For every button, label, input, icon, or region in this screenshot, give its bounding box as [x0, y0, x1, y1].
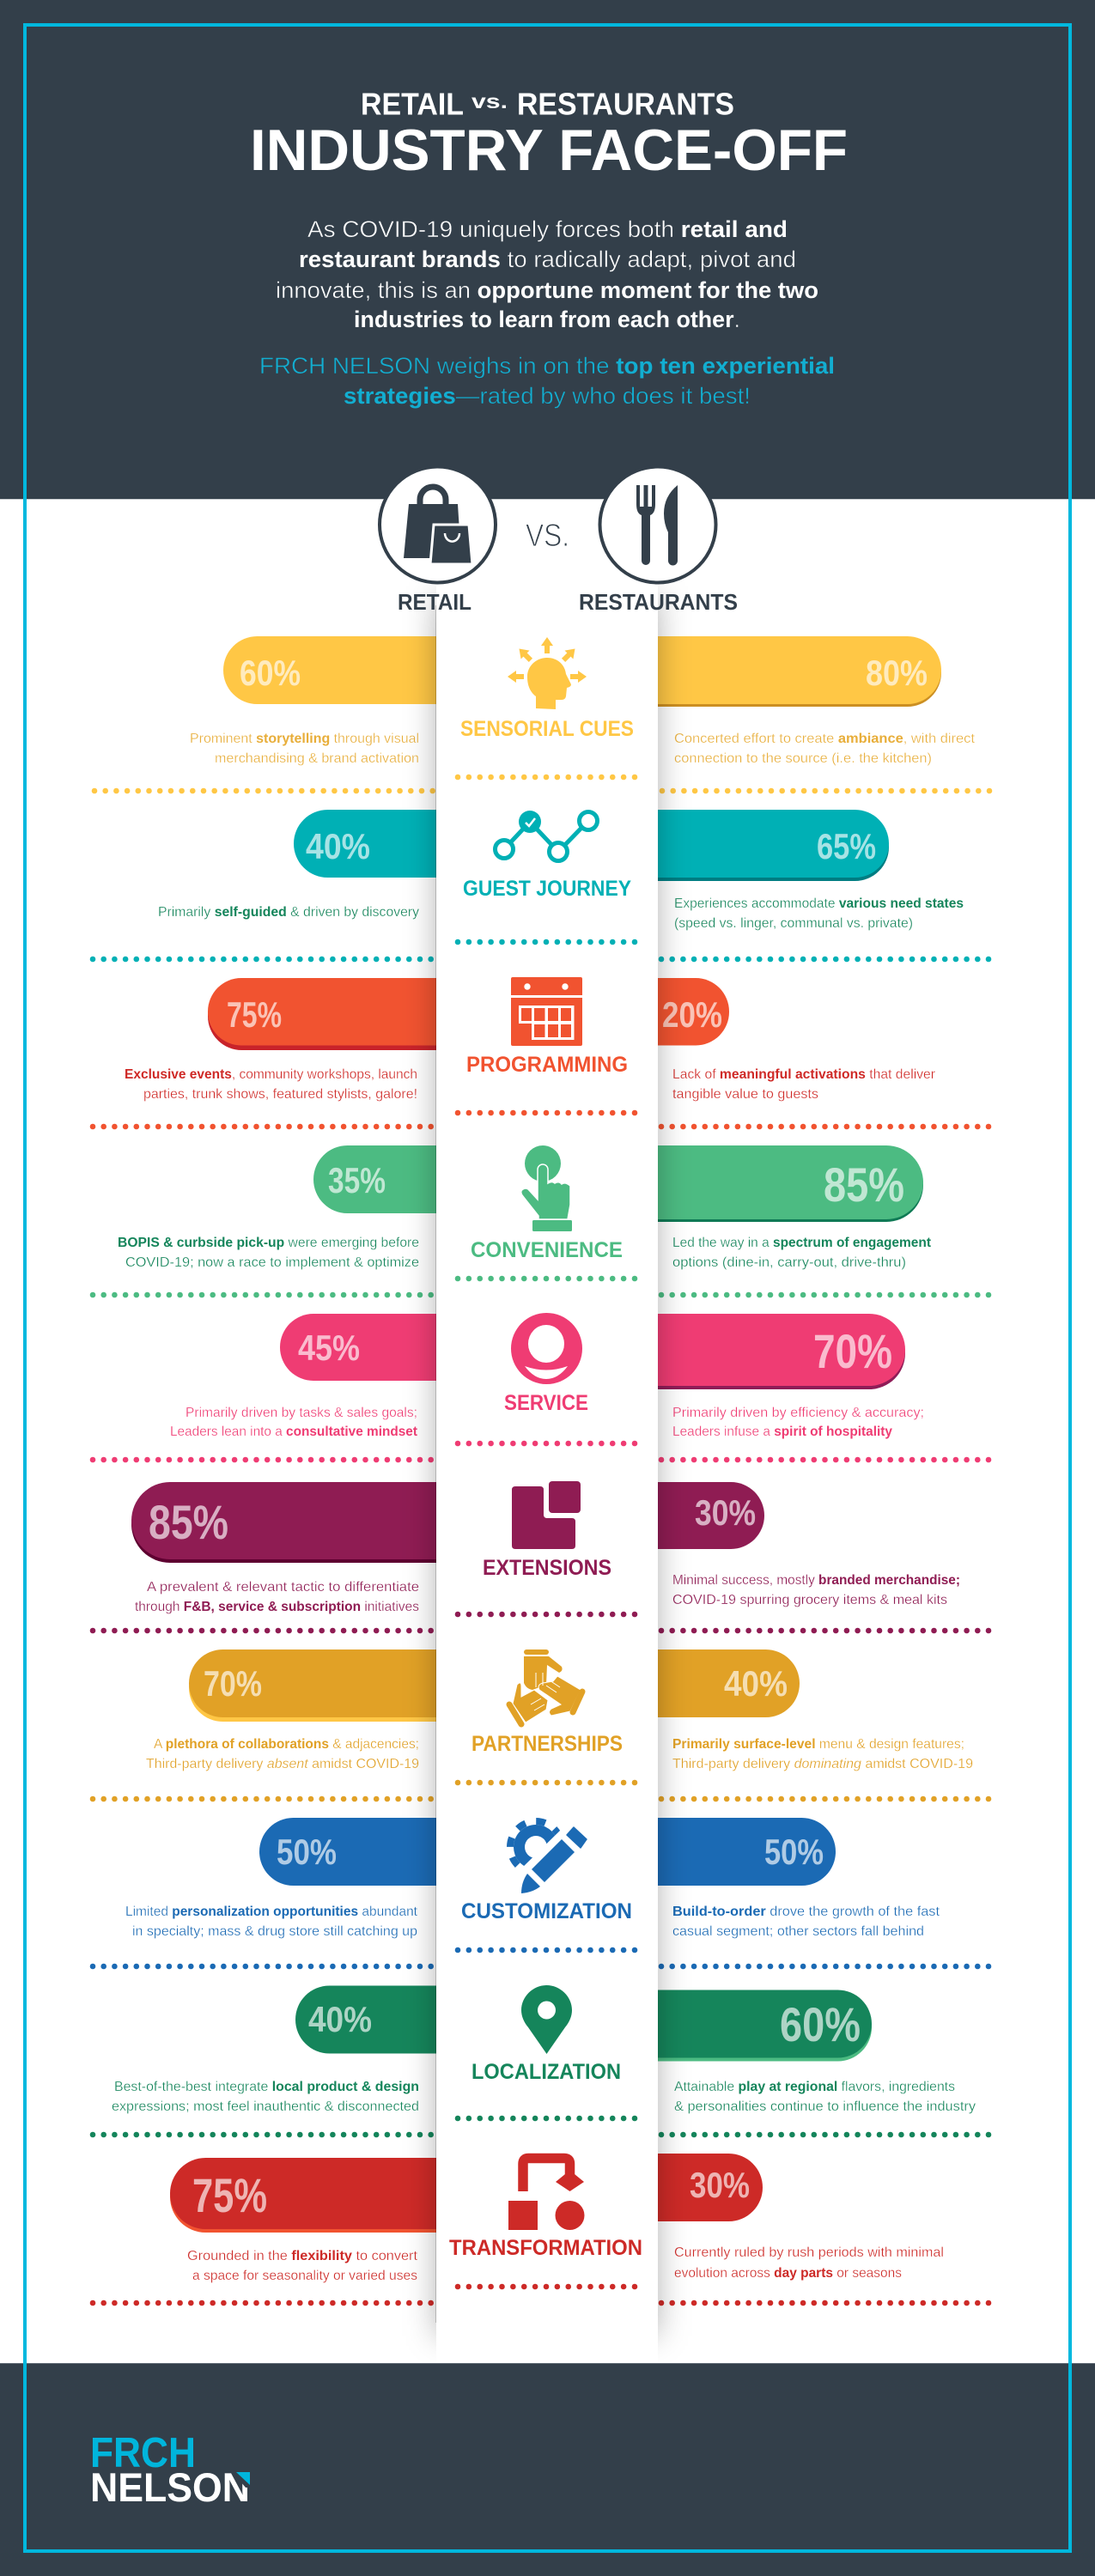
- text: restaurants sensorial: [674, 732, 976, 766]
- footer background: [0, 2363, 1095, 2576]
- text: retail extensions: [135, 1580, 419, 1614]
- intro highlight in teal: strategies—rated by who does it best!: [344, 383, 751, 409]
- header title block: [250, 86, 848, 183]
- icon: extension squares: [512, 1481, 581, 1549]
- header background: [0, 0, 1095, 499]
- bar: retail 45%: 45%: [298, 1327, 360, 1368]
- bar: restaurants 30%: [615, 2154, 763, 2221]
- bar: retail 75%: [170, 2158, 479, 2233]
- icon: head with arrows: [508, 637, 587, 709]
- text: restaurants service: Leaders infuse a spirit of hospitality: [672, 1425, 892, 1439]
- icon: gear and pencil: [510, 1821, 601, 1902]
- bar: restaurants 20%: 20%: [662, 994, 722, 1035]
- bar: retail 40%: 40%: [306, 826, 370, 866]
- text: restaurants transformation: [674, 2245, 944, 2281]
- text: retail customization: in specialty; mass & drug store still catching up: [132, 1924, 417, 1939]
- center: localization: [458, 1985, 636, 2118]
- text: retail customization: Limited personalization opportunities abundant: [125, 1905, 418, 1919]
- text: retail sensorial: Prominent storytelling through visual: [190, 732, 419, 746]
- text: restaurants guest journey: Experiences accommodate various need states: [674, 896, 964, 911]
- heading: sensorial cues: SENSORIAL CUES: [460, 717, 634, 741]
- subtitle: retail vs. restaurants: [361, 86, 734, 122]
- heading: guest journey: GUEST JOURNEY: [463, 877, 631, 901]
- bar: restaurants 30%: 30%: [690, 2165, 750, 2205]
- text: restaurants customization: casual segment; other sectors fall behind: [672, 1924, 924, 1939]
- text: retail transformation: [187, 2249, 418, 2283]
- text: restaurants localization: & personalities continue to influence the industry: [674, 2099, 976, 2114]
- bar: retail 40%: 40%: [308, 1999, 372, 2039]
- bar: retail 50%: [259, 1818, 483, 1886]
- center: service: [458, 1313, 636, 1443]
- text: retail sensorial: [190, 732, 419, 766]
- heading: convenience: CONVENIENCE: [471, 1238, 623, 1262]
- intro highlight in teal: [259, 353, 835, 409]
- text: retail customization: [125, 1905, 418, 1939]
- intro paragraph: innovate, this is an opportune moment for the two: [276, 277, 818, 303]
- text: restaurants partnerships: Third-party delivery dominating amidst COVID-19: [672, 1757, 973, 1771]
- bar: restaurants 40%: 40%: [724, 1663, 788, 1704]
- text: vs.: VS.: [526, 518, 569, 553]
- panel: transformation comparison: [93, 2154, 999, 2303]
- text: restaurants customization: [672, 1905, 940, 1939]
- center column shadow: [436, 597, 658, 2336]
- center: convenience: [458, 1145, 636, 1279]
- text: retail partnerships: Third-party delivery absent amidst COVID-19: [146, 1757, 419, 1771]
- text: restaurants convenience: options (dine-in, carry-out, drive-thru): [672, 1255, 906, 1270]
- text: retail programming: parties, trunk shows, featured stylists, galore!: [143, 1087, 417, 1102]
- panel: convenience comparison: [93, 1145, 999, 1295]
- bar: restaurants 65%: 65%: [817, 826, 876, 866]
- text: retail service: [170, 1406, 418, 1439]
- bar: retail 35%: 35%: [328, 1160, 386, 1200]
- center: customization: [458, 1821, 636, 1950]
- bar: retail 35%: [313, 1145, 485, 1213]
- logo: FRCH NELSON: NELSON: [90, 2464, 250, 2510]
- heading: extensions: EXTENSIONS: [483, 1556, 611, 1580]
- heading: customization: CUSTOMIZATION: [461, 1899, 632, 1923]
- text: retail convenience: COVID-19; now a race to implement & optimize: [125, 1255, 419, 1270]
- bar: retail 60%: 60%: [240, 653, 301, 693]
- text: retail partnerships: A plethora of collaborations & adjacencies;: [154, 1737, 419, 1752]
- subtitle: retail vs. restaurants: vs.: [471, 90, 508, 112]
- text: retail localization: expressions; most feel inauthentic & disconnected: [112, 2099, 419, 2114]
- bar: restaurants 65%: [615, 810, 889, 881]
- bar: restaurants 60%: [615, 1990, 872, 2061]
- bar: retail 70%: [189, 1649, 481, 1722]
- text: retail localization: Best-of-the-best integrate local product & design: [114, 2080, 419, 2094]
- bar: restaurants 50%: 50%: [764, 1832, 824, 1872]
- intro highlight in teal: FRCH NELSON weighs in on the top ten experiential: [259, 353, 835, 379]
- text: retail service: Leaders lean into a consultative mindset: [170, 1425, 418, 1439]
- text: restaurants programming: tangible value to guests: [672, 1087, 818, 1102]
- text: retail extensions: through F&B, service & subscription initiatives: [135, 1600, 419, 1614]
- panel: service comparison: [93, 1314, 999, 1460]
- bar: retail 50%: 50%: [277, 1832, 337, 1872]
- icon: fork and knife: [599, 467, 716, 582]
- text: retail extensions: A prevalent & relevant tactic to differentiate: [147, 1580, 419, 1595]
- text: restaurants localization: Attainable play at regional flavors, ingredients: [674, 2080, 955, 2094]
- bar: restaurants 85%: [615, 1145, 923, 1222]
- text: restaurants partnerships: Primarily surface-level menu & design features;: [672, 1737, 964, 1752]
- icon: three joined hands: [509, 1649, 582, 1724]
- intro paragraph: industries to learn from each other.: [354, 307, 740, 332]
- label: retail: RETAIL: [398, 589, 471, 615]
- text: retail transformation: Grounded in the flexibility to convert: [187, 2249, 418, 2263]
- panel: localization comparison: [93, 1985, 999, 2135]
- text: restaurants extensions: [672, 1573, 960, 1607]
- text: restaurants localization: [674, 2080, 976, 2114]
- panel: extensions comparison: [93, 1482, 999, 1631]
- panel: partnerships comparison: [93, 1649, 999, 1799]
- bar: restaurants 30%: 30%: [695, 1492, 756, 1533]
- center: partnerships: [458, 1649, 636, 1783]
- text: retail localization: [112, 2080, 419, 2114]
- text: retail convenience: BOPIS & curbside pick-up were emerging before: [118, 1236, 419, 1250]
- text: restaurants programming: [672, 1067, 936, 1102]
- subtitle: retail vs. restaurants: RESTAURANTS: [517, 86, 734, 122]
- intro paragraph: As COVID-19 uniquely forces both retail and: [307, 216, 788, 242]
- text: retail guest journey: Primarily self-guided & driven by discovery: [158, 905, 419, 920]
- text: retail convenience: [118, 1236, 419, 1270]
- icon: pointing hand: [521, 1145, 572, 1231]
- bar: retail 40%: [294, 810, 483, 878]
- bar: restaurants 80%: [615, 636, 941, 707]
- heading: programming: PROGRAMMING: [466, 1053, 628, 1077]
- intro paragraph: [276, 216, 818, 332]
- text: restaurants guest journey: [674, 896, 964, 931]
- center: guest journey: [458, 811, 636, 942]
- bar: retail 75%: [208, 978, 483, 1050]
- bar: retail 85%: 85%: [149, 1495, 228, 1549]
- logo: FRCH NELSON: FRCH: [90, 2430, 196, 2476]
- center: programming: [458, 977, 636, 1113]
- bar: retail 75%: 75%: [227, 994, 282, 1035]
- logo: FRCH NELSON: [90, 2430, 252, 2510]
- text: retail service: Primarily driven by tasks & sales goals;: [186, 1406, 417, 1420]
- bar: restaurants 20%: [615, 978, 729, 1046]
- bar: retail 45%: [280, 1314, 486, 1381]
- panel: programming comparison: [93, 978, 999, 1127]
- center: transformation: [449, 2159, 642, 2287]
- text: restaurants convenience: Led the way in a spectrum of engagement: [672, 1236, 932, 1250]
- icon: person in circle: [511, 1313, 582, 1384]
- text: restaurants extensions: COVID-19 spurring grocery items & meal kits: [672, 1593, 947, 1607]
- text: retail partnerships: [146, 1737, 419, 1771]
- subtitle: retail vs. restaurants: RETAIL: [361, 86, 464, 122]
- bar: restaurants 70%: 70%: [813, 1324, 892, 1378]
- panel: sensorial cues comparison: [94, 636, 999, 791]
- panel: guest journey comparison: [93, 810, 999, 959]
- bar: retail 70%: 70%: [204, 1663, 262, 1704]
- bar: restaurants 30%: [615, 1482, 764, 1549]
- text: restaurants service: Primarily driven by efficiency & accuracy;: [672, 1406, 924, 1420]
- bar: retail 85%: [131, 1482, 484, 1563]
- text: restaurants programming: Lack of meaningful activations that deliver: [672, 1067, 936, 1082]
- bar: retail 75%: 75%: [192, 2168, 267, 2222]
- text: restaurants extensions: Minimal success, mostly branded merchandise;: [672, 1573, 960, 1588]
- icon: map pin: [521, 1985, 572, 2054]
- icon: calendar: [511, 977, 582, 1046]
- text: restaurants transformation: Currently ruled by rush periods with minimal: [674, 2245, 944, 2260]
- center: sensorial cues: [458, 637, 636, 777]
- bar: restaurants 85%: 85%: [824, 1157, 904, 1212]
- heading: partnerships: PARTNERSHIPS: [471, 1732, 623, 1756]
- heading: service: SERVICE: [504, 1391, 588, 1415]
- text: restaurants sensorial: Concerted effort to create ambiance, with direct: [674, 732, 976, 746]
- text: restaurants guest journey: (speed vs. linger, communal vs. private): [674, 916, 913, 931]
- icon: shapes with arrow: [508, 2159, 584, 2230]
- text: restaurants convenience: [672, 1236, 932, 1270]
- text: restaurants transformation: evolution across day parts or seasons: [674, 2266, 902, 2281]
- bar: restaurants 80%: 80%: [866, 653, 928, 693]
- text: restaurants partnerships: [672, 1737, 973, 1771]
- intro paragraph: restaurant brands to radically adapt, pivot and: [299, 246, 796, 272]
- bar: restaurants 40%: [615, 1649, 800, 1717]
- title: industry face-off: INDUSTRY FACE-OFF: [250, 118, 848, 183]
- heading: transformation: TRANSFORMATION: [449, 2236, 642, 2260]
- text: retail programming: [125, 1067, 417, 1102]
- bar: restaurants 60%: 60%: [780, 1997, 861, 2051]
- center: extensions: [458, 1481, 636, 1614]
- bar: retail 40%: [295, 1985, 484, 2054]
- bar: restaurants 50%: [615, 1818, 836, 1886]
- bar: restaurants 70%: [615, 1314, 905, 1389]
- bar: retail 60%: [223, 636, 481, 704]
- text: retail programming: Exclusive events, community workshops, launch: [125, 1067, 417, 1082]
- text: restaurants customization: Build-to-order drove the growth of the fast: [672, 1905, 940, 1919]
- panel: customization comparison: [93, 1818, 999, 1966]
- icon: retail shopping bags: [380, 467, 496, 582]
- text: retail sensorial: merchandising & brand activation: [215, 751, 419, 766]
- heading: localization: LOCALIZATION: [471, 2060, 621, 2084]
- center column: [436, 500, 658, 2363]
- label: restaurants: RESTAURANTS: [579, 589, 738, 615]
- text: restaurants sensorial: connection to the source (i.e. the kitchen): [674, 751, 932, 766]
- text: restaurants service: [672, 1406, 924, 1439]
- icon: journey path: [495, 811, 598, 860]
- text: retail transformation: a space for seasonality or varied uses: [192, 2269, 417, 2283]
